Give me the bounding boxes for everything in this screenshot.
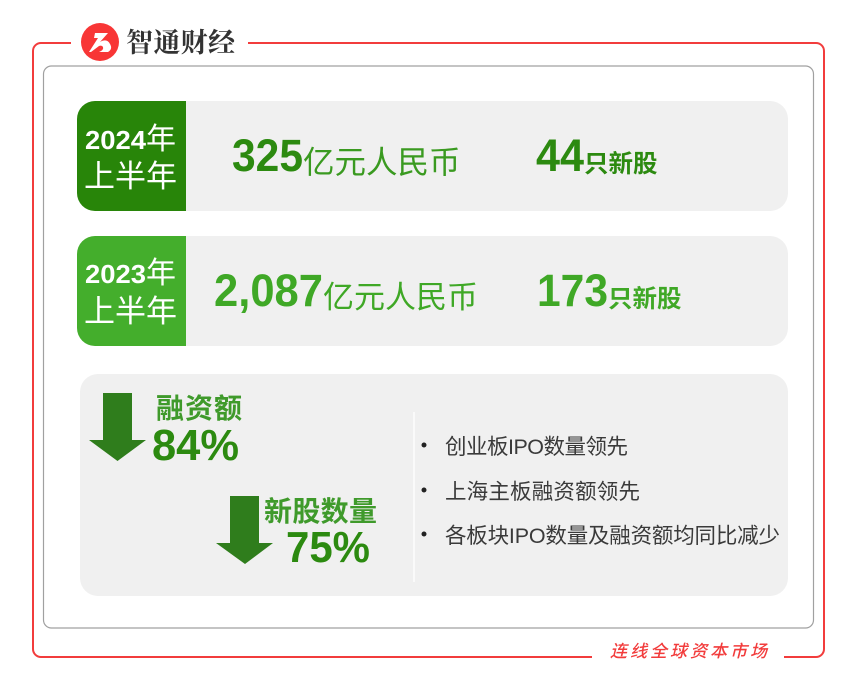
year tag 2023: 上半年 <box>84 294 177 329</box>
footer slogan: 连线全球资本市场 <box>610 642 769 661</box>
new listings drop 75%: 75% <box>286 523 370 572</box>
year tag 2024 <box>77 101 186 211</box>
bullet 2: 上海主板融资额领先 <box>445 480 640 504</box>
brand name: 智通财经 <box>126 21 236 60</box>
panel: year-on-year summary <box>80 374 788 596</box>
year tag 2023: 2023年 <box>85 257 176 290</box>
fundraising 2023: 亿元人民币 <box>323 280 478 315</box>
fundraising 2023: 2,087 <box>214 265 323 316</box>
new listings 2023: 只新股 <box>608 285 682 313</box>
icon: brand logo <box>81 23 119 61</box>
year tag 2024: 上半年 <box>84 159 177 194</box>
new listings label: 新股数量 <box>264 496 377 527</box>
panel: 2024 first half <box>77 101 788 211</box>
arrow: new listings down <box>216 496 273 564</box>
header logo and brand <box>81 21 236 61</box>
arrow: fundraising down <box>89 393 146 461</box>
fundraising drop 84%: 84% <box>152 421 239 470</box>
new listings 2024: 44 <box>536 130 584 181</box>
year tag 2024: 2024年 <box>85 123 176 156</box>
new listings 2023: 173 <box>537 265 608 316</box>
fundraising 2024: 325 <box>232 130 303 181</box>
fundraising 2024: 亿元人民币 <box>303 144 461 180</box>
bullet list <box>422 435 780 548</box>
fundraising label: 融资额 <box>156 393 242 424</box>
bullet 1: 创业板IPO数量领先 <box>445 435 628 459</box>
year tag 2023 <box>77 236 186 346</box>
panel: 2023 first half <box>77 236 788 346</box>
bullet 3: 各板块IPO数量及融资额均同比减少 <box>445 524 780 548</box>
new listings 2024: 只新股 <box>584 150 658 178</box>
